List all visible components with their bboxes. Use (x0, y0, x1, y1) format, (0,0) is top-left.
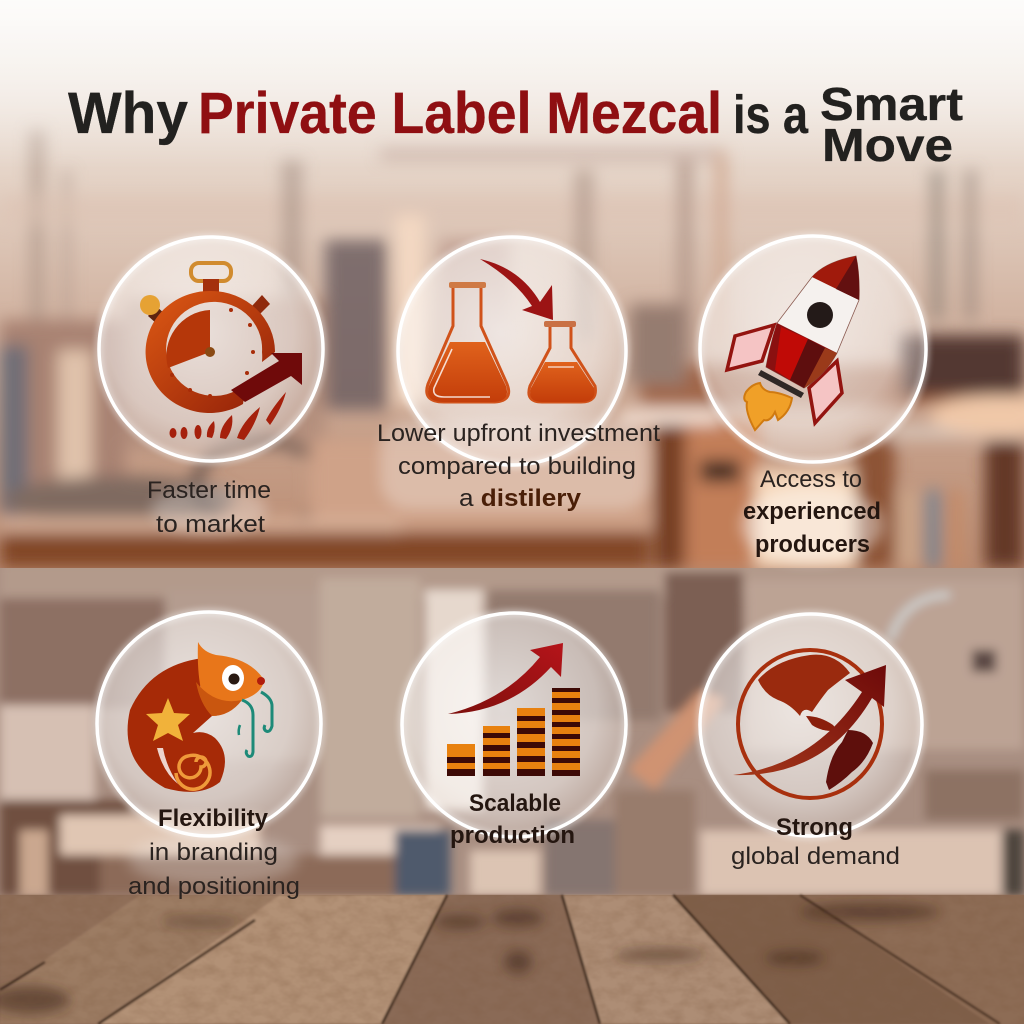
title: Private Label Mezcal (198, 81, 722, 146)
caption: Faster time (147, 477, 271, 504)
caption: Scalable (469, 790, 561, 817)
caption: Strong (776, 814, 853, 841)
caption: experienced (743, 498, 881, 525)
title: Move (822, 119, 953, 171)
caption: Lower upfront investment (377, 420, 660, 447)
caption (740, 466, 884, 563)
panel: strong global demand (700, 614, 922, 870)
title: is a (733, 85, 809, 145)
caption: global demand (731, 843, 900, 870)
caption: producers (755, 531, 870, 558)
title: Why (68, 81, 188, 146)
title: Smart (820, 78, 963, 130)
caption: production (450, 822, 575, 849)
caption (128, 805, 300, 900)
panel: flexibility in branding (97, 612, 321, 900)
icon: rocket (727, 256, 859, 430)
icon: small flask (529, 321, 595, 402)
caption: and positioning (128, 873, 300, 900)
icon: growth arrow (448, 643, 563, 714)
panel: scalable production (402, 613, 626, 849)
caption (450, 790, 575, 849)
caption: a distilery (459, 485, 582, 512)
panel: faster time to market (99, 237, 323, 538)
caption (147, 477, 271, 538)
background: blurred distillery, lower section (0, 562, 1024, 896)
caption: to market (156, 511, 265, 538)
title (68, 78, 963, 171)
chart: rising striped bars (447, 688, 580, 776)
panel: lower upfront investment (377, 237, 660, 512)
wooden tabletop (0, 895, 1024, 1024)
caption: compared to building (398, 453, 636, 480)
icon: downward arrow (480, 259, 553, 320)
caption: Access to (760, 466, 862, 493)
caption: Flexibility (158, 805, 269, 832)
icon: globe with arrow (733, 650, 886, 798)
panel: access to experienced producers (700, 236, 926, 563)
caption (377, 420, 660, 512)
caption (731, 814, 900, 870)
background: blurred distillery, upper section (0, 0, 1024, 568)
caption: in branding (149, 839, 278, 866)
icon: stopwatch with arrow (140, 263, 302, 440)
icon: chameleon (128, 642, 272, 792)
icon: large flask (427, 282, 509, 402)
